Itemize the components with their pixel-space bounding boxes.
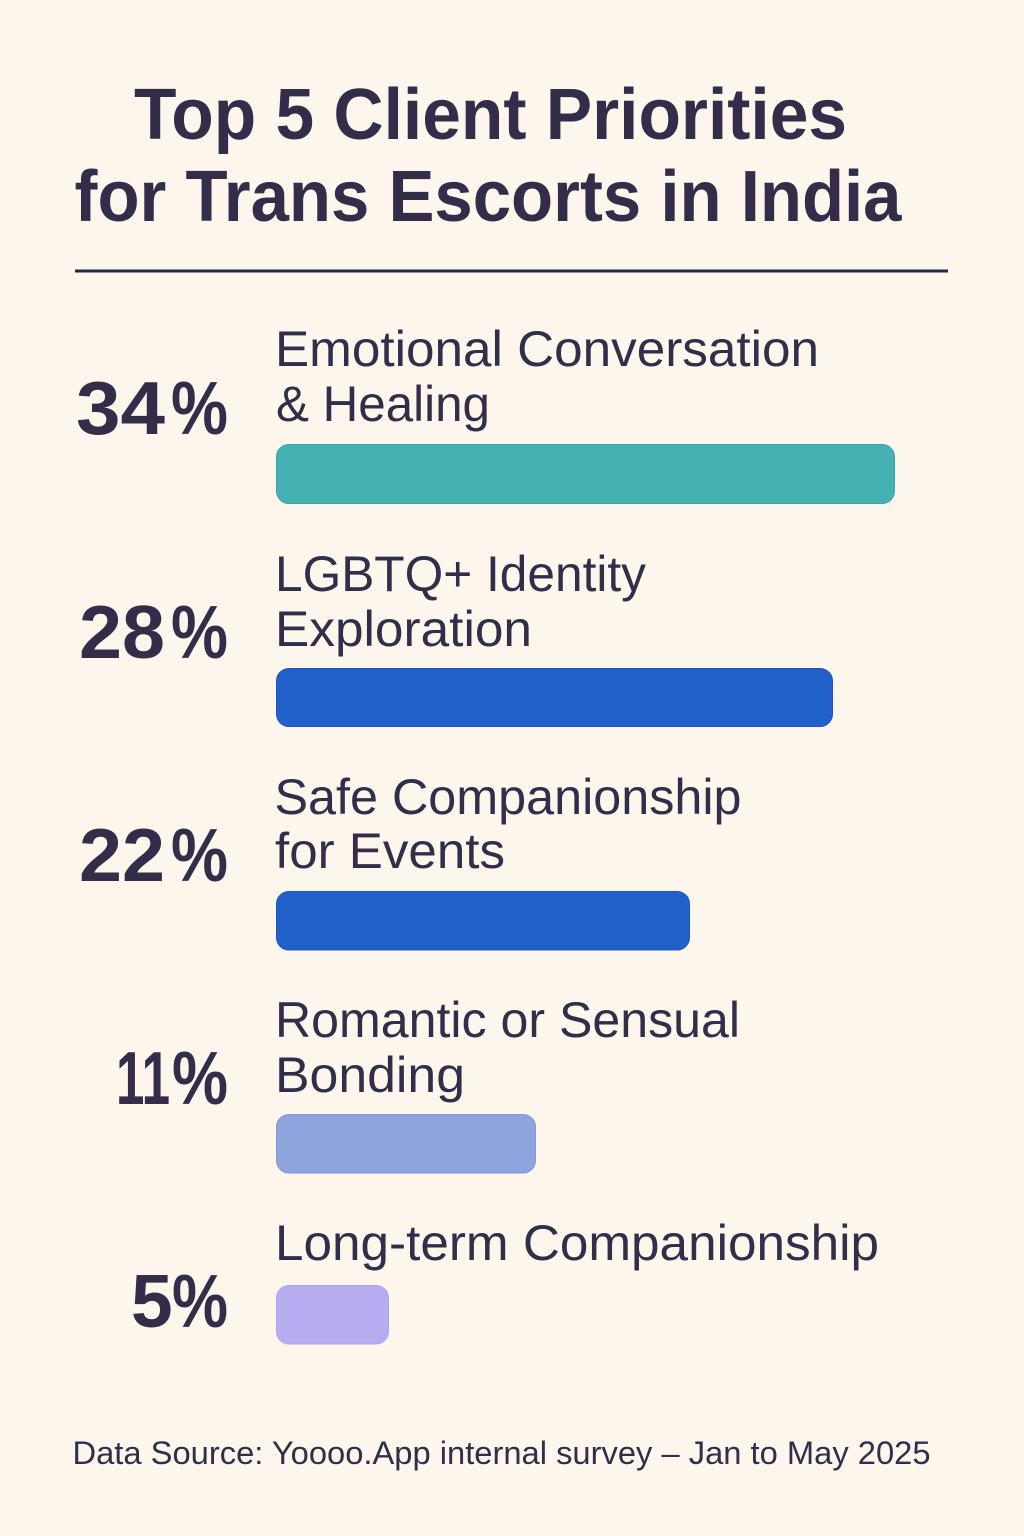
label: romantic bonding: Bonding	[275, 1047, 465, 1103]
percentage: 28%: %	[171, 590, 228, 674]
label: romantic bonding	[275, 992, 740, 1103]
bar: 28%	[276, 668, 832, 726]
percentage: 22%: %	[171, 813, 228, 897]
data source footer: Data Source: Yoooo.App internal survey – Jan to May 2025	[72, 1435, 930, 1471]
label: safe companionship	[274, 769, 742, 879]
percentage: 28%	[79, 590, 228, 674]
row: romantic bonding	[116, 992, 740, 1173]
title	[74, 75, 902, 237]
label: identity exploration: Exploration	[275, 601, 532, 657]
percentage: 5%: %	[172, 1259, 228, 1343]
percentage: 5%	[131, 1259, 228, 1343]
label: safe companionship: Safe Companionship	[274, 769, 742, 825]
bar: 5%	[276, 1286, 388, 1344]
label: identity exploration	[275, 546, 646, 657]
percentage: 5%: 5	[131, 1259, 173, 1343]
row: long-term companionship	[131, 1215, 879, 1344]
row: identity exploration	[79, 546, 832, 726]
percentage: 34%	[76, 366, 228, 450]
bar: 34%	[276, 444, 894, 504]
bar: 11%	[276, 1114, 536, 1173]
label: long-term companionship: Long-term Companionship	[275, 1215, 879, 1271]
label: emotional conversation: Emotional Conversation	[275, 321, 819, 377]
label: identity exploration: LGBTQ+ Identity	[275, 546, 646, 602]
bar: 22%	[276, 892, 690, 950]
percentage: 11%: %	[172, 1036, 228, 1120]
label: emotional conversation	[275, 321, 819, 432]
percentage: 11%: 11	[116, 1036, 170, 1120]
title: Top 5 Client Priorities	[134, 75, 847, 155]
percentage: 28%: 28	[79, 590, 165, 674]
label: safe companionship: for Events	[275, 823, 505, 879]
percentage: 22%	[79, 813, 228, 897]
percentage: 22%: 22	[79, 813, 165, 897]
percentage: 34%: %	[171, 366, 228, 450]
row: emotional conversation	[76, 321, 894, 504]
title: for Trans Escorts in India	[74, 157, 902, 237]
row: safe companionship	[79, 769, 742, 950]
percentage: 34%: 34	[76, 366, 165, 450]
label: emotional conversation: & Healing	[276, 376, 490, 432]
label: romantic bonding: Romantic or Sensual	[275, 992, 740, 1048]
